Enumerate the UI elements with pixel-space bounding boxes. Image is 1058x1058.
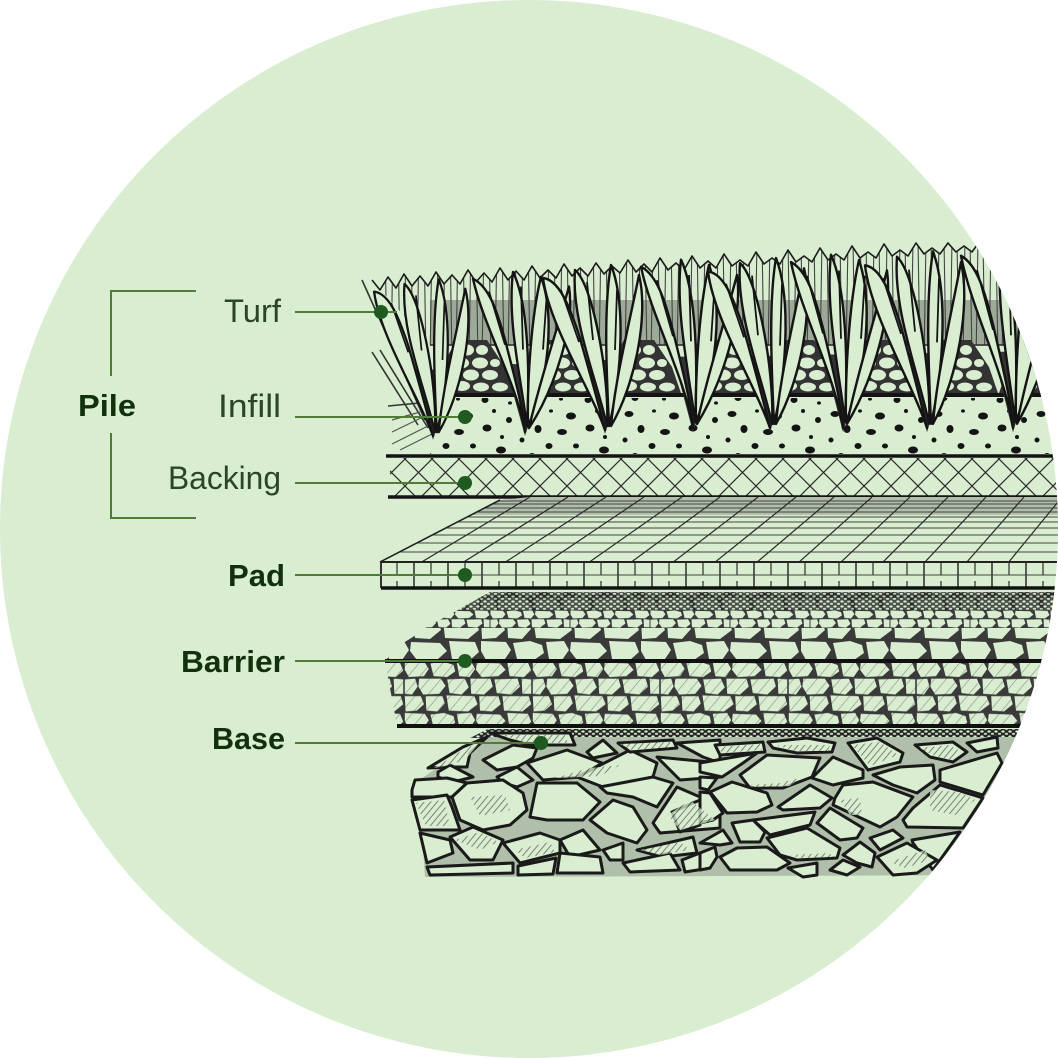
label: Pad: Pad [228, 558, 285, 593]
leader: Infill [295, 410, 472, 424]
layer drawing: grass blades [374, 248, 1058, 440]
layer drawing: barrier [385, 592, 1058, 726]
layer drawing: base stones [412, 729, 1058, 877]
label: Base: Base [212, 721, 285, 756]
layer drawing: pebble infill clusters [431, 340, 1058, 396]
label: Infill: Infill [218, 388, 281, 424]
layer drawing: backing mesh [386, 456, 1058, 497]
illustration: turf cross-section layers [362, 241, 1058, 877]
layer drawing: pad [380, 497, 1058, 588]
leader: Turf [295, 305, 397, 319]
bracket: Pile group [111, 291, 196, 518]
leader: Backing [295, 476, 472, 490]
label: Turf: Turf [224, 293, 281, 329]
leader: Barrier [295, 654, 472, 668]
label: Barrier: Barrier [181, 644, 285, 679]
layer drawing: grass backdrop [362, 241, 1058, 428]
leader: Pad [295, 568, 472, 582]
layer drawing: infill granules [388, 398, 1058, 454]
label: Pile: Pile [78, 388, 136, 423]
leader: Base [295, 736, 548, 750]
label: Backing: Backing [168, 460, 281, 496]
